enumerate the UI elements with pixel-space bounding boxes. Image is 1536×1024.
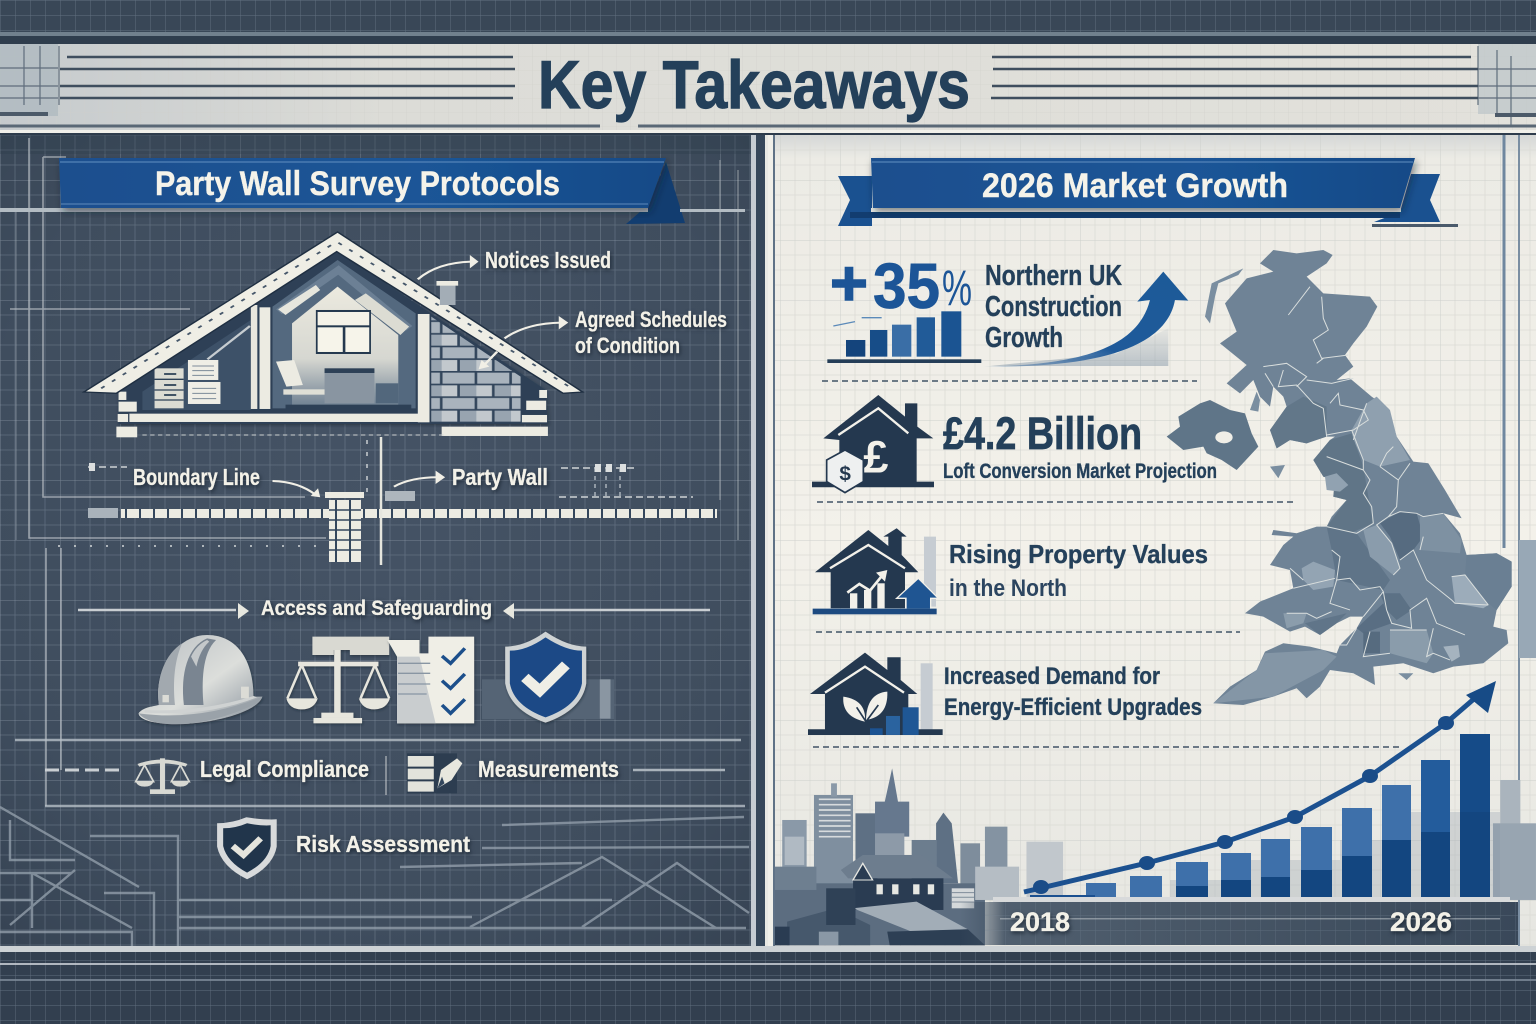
stat: +35% Northern UK Construction Growth [827,247,1188,367]
item: Risk Assessment: Risk Assessment [296,831,470,857]
stat: £4.2 Billion: Loft Conversion Market Projection [943,460,1217,483]
roof band [84,232,583,393]
illustration: loft conversion cross-section house [84,232,583,437]
bar chart: 2018 to 2026 growth [993,734,1510,902]
truss sketches [0,807,749,946]
icon: outline shield [217,817,277,879]
label: Boundary Line: Boundary Line [133,464,260,490]
stat: Energy-Efficient Upgrades [808,653,1202,735]
exposed brick section [431,317,521,423]
stat: Energy-Efficient Upgrades: Increased Demand for [944,663,1160,690]
left attic storage [142,320,251,410]
illustration: skyline and houses [775,768,1536,945]
centre divider [751,134,775,949]
lighter and darker regions [1213,397,1512,703]
stat: +35% Northern UK Construction Growth: Construction [985,291,1122,323]
label: Agreed Schedules of Condition: Agreed Schedules [575,307,727,332]
region borders [1263,287,1488,660]
icon: hard hat [139,635,262,724]
label: Party Wall: Party Wall [452,464,548,490]
banner text: 2026 Market Growth [982,167,1288,205]
panel: right chart paper [775,134,1536,946]
faint bars behind [1170,812,1500,898]
axis labels: 2026 [1390,907,1452,937]
panel: left blueprint [0,134,752,949]
icon: house with pound sign: $ [839,463,851,486]
icon: house with rising chart [813,528,938,614]
item: Legal Compliance [45,756,369,794]
stat: £4.2 Billion [812,395,1217,493]
baseline [993,897,1510,902]
diagram: boundary wall and party wall section [58,437,717,565]
stat: Rising Property Values: in the North [949,575,1067,602]
distant city [782,768,1536,900]
axis labels [1010,907,1452,937]
growth arrow [983,272,1188,367]
stat: +35% Northern UK Construction Growth: % [942,260,972,316]
chimney column [325,492,364,562]
islands [1205,268,1413,680]
stat: Rising Property Values [813,528,1208,614]
grey block behind shield [482,679,614,719]
arrows: house callouts [273,255,568,497]
banner: 2026 Market Growth [838,158,1458,227]
icon: brick and pen [407,753,462,793]
trend line with markers [1024,681,1496,894]
heading: Access and Safeguarding [78,597,710,620]
heading: Access and Safeguarding: Access and Safeguarding [261,597,492,620]
icon: house with leaf [808,653,943,735]
house foreground [775,855,1019,945]
icon: blue shield [505,632,586,723]
stat: £4.2 Billion: £4.2 Billion [943,408,1142,459]
timber studs [251,305,430,422]
icon: house with pound sign: £ [863,432,888,483]
icons row: safeguarding [139,632,614,724]
stat: +35% Northern UK Construction Growth: Growth [985,322,1063,354]
label: Agreed Schedules of Condition [575,307,727,358]
Northern Ireland [1167,400,1258,470]
item: Legal Compliance: Legal Compliance [200,756,369,782]
item: Measurements: Measurements [478,756,619,782]
stat: +35% Northern UK Construction Growth: 35 [873,250,940,322]
icon: house with pound sign [812,395,934,493]
Lough Neagh [1215,431,1233,443]
chimney [436,281,458,305]
bar icon [827,311,981,363]
central room [273,260,416,409]
header band [0,44,1536,135]
map: United Kingdom regions [1167,250,1512,705]
house interior shell [119,251,548,424]
axis labels: 2018 [1010,907,1070,937]
chart base strip [960,902,1518,945]
item: Risk Assessment [217,817,470,879]
page background [0,0,1536,44]
item: Measurements [386,753,725,795]
label: Agreed Schedules of Condition: of Condition [575,333,680,358]
icon: small scales [136,758,189,794]
eaves and floor blocks [116,390,548,437]
icon: checklist [387,637,474,723]
icon: scales of justice [286,637,390,723]
banner text: Party Wall Survey Protocols [155,165,560,203]
title: Key Takeaways [538,47,970,123]
banner: Party Wall Survey Protocols [0,158,745,224]
stat: +35% Northern UK Construction Growth: Northern UK [985,260,1122,292]
footer band [0,946,1536,1024]
stat: +35% Northern UK Construction Growth: + [830,247,868,319]
Great Britain mainland [1213,250,1512,705]
stat: Rising Property Values: Rising Property Values [949,539,1208,569]
stat: Energy-Efficient Upgrades: Energy-Efficient Upgrades [944,694,1202,721]
label: Notices Issued: Notices Issued [485,247,611,273]
